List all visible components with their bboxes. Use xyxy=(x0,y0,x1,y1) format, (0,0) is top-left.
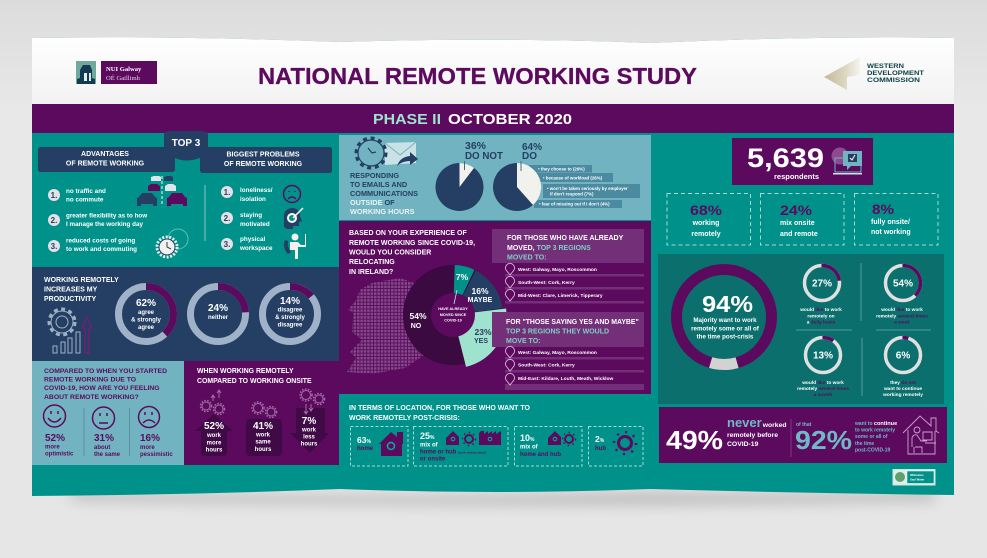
logo: Western Development Commission xyxy=(824,57,924,90)
panel: respondents xyxy=(732,138,873,185)
relocating question xyxy=(349,230,475,276)
box: 2% hub: hub xyxy=(595,446,606,452)
stat box: 24% mix onsite and remote: mix onsite xyxy=(780,220,815,227)
reasons list: • fear of missing out if I don't (4%) xyxy=(539,202,610,206)
stat: 31% about the same: the same xyxy=(94,452,121,458)
stat: 16% more pessimistic: more xyxy=(140,445,155,451)
donut: 14% disagree: 14% xyxy=(280,296,300,307)
stat: 7% work less hours: hours xyxy=(301,442,318,448)
donut: 54% several times a week: remotely several times xyxy=(876,314,928,320)
problems list: loneliness/ xyxy=(240,187,273,194)
advantages list: 1. xyxy=(51,191,57,200)
panel: top 3 advantages and problems xyxy=(32,131,339,267)
donut: 6% do not want to continue: they do not xyxy=(890,380,916,386)
title: NATIONAL REMOTE WORKING STUDY xyxy=(258,63,697,89)
logo: NUI Galway: NUI Galway xyxy=(106,66,142,73)
donut: 94% majority: 94% xyxy=(702,291,753,317)
donut: 13% several times a month: remotely several times xyxy=(797,386,849,392)
responding text: TO EMAILS AND xyxy=(350,180,407,189)
continue text: post-COVID-19 xyxy=(855,448,890,454)
advantages list: 3. xyxy=(51,242,57,251)
panel: hours worked xyxy=(184,361,339,465)
donut: 13% several times a month: would like to work xyxy=(801,380,844,386)
advantages list: no commute xyxy=(66,196,104,204)
responding text: RESPONDING xyxy=(350,171,399,180)
location heading: WORK REMOTELY POST-CRISIS: xyxy=(349,415,460,422)
pie: 64% do: 64% xyxy=(522,141,543,153)
pie: 64% do: DO xyxy=(522,151,537,162)
divider xyxy=(204,185,206,241)
panel: respondents: 5,639 xyxy=(747,143,824,173)
stat box: 8% fully onsite xyxy=(854,194,938,245)
box: 10% mix of home and hub: 10% xyxy=(520,433,535,443)
top 3 heading xyxy=(38,131,332,173)
advantages list: to work and commuting xyxy=(66,246,137,253)
donut: 27% daily: would like to work xyxy=(799,307,842,313)
logo: Western Development Commission: WESTERN xyxy=(867,63,904,70)
stat: 52% work more hours: work xyxy=(206,433,222,439)
relocating question: REMOTE WORKING SINCE COVID-19, xyxy=(349,240,475,247)
never worked text xyxy=(727,415,786,448)
stat box: 68% working remotely: 68% xyxy=(690,202,723,218)
responding text: COMMUNICATIONS xyxy=(350,189,418,198)
donut: 27% daily: remotely on xyxy=(807,314,835,320)
donut chart: relocating: 7% xyxy=(456,272,469,282)
box: 10% mix of home and hub: home and hub xyxy=(520,452,561,458)
donut chart: relocating: 16% xyxy=(471,286,489,296)
header band xyxy=(32,36,954,104)
stat box: 8% fully onsite: 8% xyxy=(872,201,895,217)
donut: 14% disagree: disagree xyxy=(278,308,303,314)
box: 25% mix of home or hub or onsite: mix of xyxy=(420,442,439,448)
pie: 36% do not xyxy=(436,140,503,211)
reasons list: • won't be taken seriously by employer xyxy=(547,186,628,191)
logo: Western Development Commission: DEVELOPMENT xyxy=(867,70,924,77)
productivity heading: WORKING REMOTELY xyxy=(44,277,119,284)
productivity heading: INCREASES MY xyxy=(44,286,98,294)
stat box: 68% working remotely xyxy=(667,194,750,245)
logo: Western Development Commission: COMMISSION xyxy=(867,77,920,84)
icon: clock and gears xyxy=(157,229,188,257)
stat: 41% work same hours xyxy=(246,402,282,456)
box: 63% home: 63% xyxy=(357,435,371,445)
dotted map of Ireland xyxy=(347,278,424,374)
icon: survey on laptop xyxy=(832,148,862,174)
regions already moved: MOVED TO: xyxy=(507,254,547,262)
regions already moved: FOR THOSE WHO HAVE ALREADY xyxy=(507,235,624,242)
problems list xyxy=(221,186,273,252)
panel: location post-crisis xyxy=(349,405,643,466)
productivity heading xyxy=(44,277,119,303)
donut: 62% agree: agree xyxy=(138,310,155,316)
panel: never worked remotely before xyxy=(659,407,947,463)
stat: 52% more optimistic: 52% xyxy=(45,433,65,444)
stat: 7% work less hours: 7% xyxy=(302,416,316,427)
donut: 13% several times a month: a month xyxy=(814,392,832,398)
regions would move to: Mid-East: Kildare, Louth, Meath, Wicklow xyxy=(518,376,614,382)
stat: 52% work more hours xyxy=(195,390,233,456)
panel: productivity xyxy=(32,267,339,361)
stat: 92%: 92% xyxy=(795,425,852,455)
donut: 54% several times a week: a week xyxy=(894,320,910,326)
responding text xyxy=(350,171,418,216)
donut: 14% disagree xyxy=(262,286,318,342)
icon: person at desk xyxy=(284,234,306,259)
advantages list: greater flexibility as to how xyxy=(66,212,147,220)
location heading: IN TERMS OF LOCATION, FOR THOSE WHO WANT TO xyxy=(349,405,531,412)
stat: 31% about the same: 31% xyxy=(94,433,114,444)
regions would move to: FOR "THOSE SAYING YES AND MAYBE" xyxy=(506,319,639,326)
logo: NUI Galway: OÉ Gaillimh xyxy=(106,74,141,82)
box: 63% home: home xyxy=(357,446,374,452)
donut: 94% majority: Majority want to work xyxy=(693,317,757,324)
donut chart: relocating: 23% xyxy=(474,327,492,337)
stat: 7% work less hours: work xyxy=(301,428,317,434)
problems list: 1. xyxy=(224,188,230,197)
hours heading xyxy=(197,368,312,383)
icon: cars xyxy=(137,176,187,206)
reasons list: if don't respond (7%) xyxy=(550,192,594,196)
stat box: 24% mix onsite and remote: and remote xyxy=(780,231,818,238)
stat: 31% about the same: about xyxy=(94,445,110,451)
box: 25% mix of home or hub or onsite: or onsite xyxy=(420,456,446,462)
pie: 36% do not: 36% xyxy=(465,140,487,152)
regions would move to: West: Galway, Mayo, Roscommon xyxy=(518,350,597,356)
box: 25% mix of home or hub or onsite: home or hub (work sharing space) xyxy=(420,450,486,456)
relocating question: BASED ON YOUR EXPERIENCE OF xyxy=(349,230,467,237)
box: 63% home xyxy=(350,426,408,466)
regions would move to: MOVE TO: xyxy=(506,338,540,345)
icon: clock gear and envelope xyxy=(356,138,418,168)
stat: 52% work more hours: hours xyxy=(206,448,223,454)
problems list: staying xyxy=(240,212,262,219)
donut chart: relocating: NO xyxy=(411,323,422,330)
donut: 14% disagree: disagree xyxy=(278,322,303,328)
purple band with phase heading xyxy=(32,104,954,133)
icon: happy face xyxy=(44,405,66,427)
donut: 54% several times a week: would like to work xyxy=(880,307,923,313)
donut: 62% agree xyxy=(118,286,174,342)
stat: 52% more optimistic xyxy=(45,433,74,458)
stat: 52% work more hours: 52% xyxy=(204,421,224,432)
feelings heading xyxy=(44,368,167,401)
box: 25% mix of home or hub or onsite: 25% xyxy=(420,431,435,441)
panel: future remote working preferences xyxy=(658,254,944,404)
brochure page xyxy=(32,36,954,498)
continue text: want to continue xyxy=(854,421,897,427)
page base teal xyxy=(32,36,954,498)
stat: 52% more optimistic: more xyxy=(45,444,60,450)
donut chart: relocating: 54% xyxy=(409,311,427,321)
advantages list: no traffic and xyxy=(66,188,106,195)
box: 2% hub xyxy=(588,426,643,466)
icon: sad face xyxy=(284,186,300,202)
stat: 41% work same hours: same xyxy=(255,440,271,446)
icon: gear and growth bars xyxy=(49,309,92,353)
panel: responding outside working hours xyxy=(339,133,651,221)
problems list: motivated xyxy=(240,221,270,228)
stat: 16% more pessimistic xyxy=(140,433,173,458)
panel: respondents: respondents xyxy=(774,172,819,181)
regions would move to: TOP 3 REGIONS THEY WOULD xyxy=(506,328,609,336)
continue text: some or all of xyxy=(855,434,888,440)
panel: never worked remotely before: of that xyxy=(796,422,812,428)
stat: 52% work more hours: more xyxy=(207,440,222,446)
feelings heading: ABOUT REMOTE WORKING? xyxy=(44,394,139,401)
pie: 36% do not: DO NOT xyxy=(465,151,503,162)
feelings heading: COVID-19, HOW ARE YOU FEELING xyxy=(44,385,160,392)
problems list: 2. xyxy=(224,214,230,223)
stat box: 24% mix onsite and remote xyxy=(760,194,844,245)
relocating question: WOULD YOU CONSIDER xyxy=(349,250,431,256)
relocating question: RELOCATING xyxy=(349,259,395,266)
regions already moved: West: Galway, Mayo, Roscommon xyxy=(518,267,597,273)
productivity heading: PRODUCTIVITY xyxy=(44,296,96,303)
badge: Wicklow xyxy=(893,470,935,485)
stat box: 24% mix onsite and remote: 24% xyxy=(780,202,813,218)
never worked text: COVID-19 xyxy=(727,441,759,448)
donut: 14% disagree: & strongly xyxy=(275,315,305,321)
donut: 94% majority: remotely some or all of xyxy=(691,326,760,332)
stat box: 8% fully onsite: fully onsite/ xyxy=(871,219,910,226)
problems list: isolation xyxy=(240,196,266,203)
advantages list: 2. xyxy=(51,216,57,225)
advantages list: I manage the working day xyxy=(66,221,143,228)
donut: 54% several times a week xyxy=(876,266,928,326)
hours heading: COMPARED TO WORKING ONSITE xyxy=(197,378,312,385)
stat: 7% work less hours: less xyxy=(303,434,315,440)
donut: 6% do not want to continue: 6% xyxy=(896,350,910,362)
stat: 49%: 49% xyxy=(666,425,723,455)
location heading xyxy=(349,405,531,422)
donut: 54% several times a week: 54% xyxy=(893,278,913,290)
donut chart: relocating xyxy=(403,265,503,365)
top 3 heading: TOP 3 xyxy=(172,138,201,149)
top 3 heading: BIGGEST PROBLEMS xyxy=(226,152,300,158)
problems list: workspace xyxy=(239,245,273,252)
donut: 94% majority: the time post-crisis xyxy=(697,334,754,340)
stat: 41% work same hours: hours xyxy=(255,447,272,453)
top 3 heading: OF REMOTE WORKING xyxy=(224,161,303,168)
stat: 7% work less hours xyxy=(290,389,329,453)
reasons list xyxy=(529,165,640,208)
donut: 6% do not want to continue: working remotely xyxy=(882,392,923,398)
icon: sad face xyxy=(138,406,160,428)
reasons list: • they choose to (26%) xyxy=(538,166,585,172)
advantages list: reduced costs of going xyxy=(66,238,135,244)
box: 10% mix of home and hub xyxy=(514,426,582,466)
purple band with phase heading: OCTOBER 2020 xyxy=(448,111,572,128)
stat: 41% work same hours: 41% xyxy=(253,421,273,432)
stat: 41% work same hours: work xyxy=(255,432,271,438)
box: 25% mix of home or hub or onsite xyxy=(414,426,508,466)
responding text: OUTSIDE OF xyxy=(350,198,395,207)
donut: 13% several times a month xyxy=(797,338,849,398)
feelings heading: REMOTE WORKING DUE TO xyxy=(44,376,136,384)
donut chart: relocating: MAYBE xyxy=(468,297,493,304)
responding text: WORKING HOURS xyxy=(350,207,415,216)
donut: 24% neither: 24% xyxy=(208,303,228,314)
stat: 16% more pessimistic: pessimistic xyxy=(140,452,173,458)
regions would move to xyxy=(492,312,644,390)
donut: 62% agree: agree xyxy=(138,325,155,331)
regions would move to: South-West: Cork, Kerry xyxy=(518,362,575,368)
box: 10% mix of home and hub: mix of xyxy=(520,444,539,450)
continue text: to work remotely xyxy=(855,428,895,434)
icon: person working at home xyxy=(903,416,939,454)
donut: 62% agree: 62% xyxy=(136,298,156,309)
donut chart: relocating: YES xyxy=(474,338,488,345)
reasons list: • because of workload (26%) xyxy=(543,176,603,180)
donut: 62% agree: & strongly xyxy=(131,318,161,324)
donut: 24% neither xyxy=(190,286,246,342)
stat box: 68% working remotely: remotely xyxy=(691,231,721,238)
feelings heading: COMPARED TO WHEN YOU STARTED xyxy=(44,368,167,375)
box: 2% hub: 2% xyxy=(595,434,605,444)
relocating question: IN IRELAND? xyxy=(349,269,393,276)
donut chart: relocating: MOVED SINCE xyxy=(440,313,467,317)
top 3 heading: ADVANTAGES xyxy=(81,151,129,158)
donut: 6% do not want to continue xyxy=(882,338,923,398)
regions already moved: South-West: Cork, Kerry xyxy=(518,280,575,286)
donut: 24% neither: neither xyxy=(208,315,229,321)
logo: NUI Galway xyxy=(76,61,157,84)
advantages list xyxy=(48,188,147,253)
continue text: the time xyxy=(855,441,874,447)
hours heading: WHEN WORKING REMOTELY xyxy=(197,368,294,375)
icon: target head xyxy=(284,208,303,229)
page shadow xyxy=(70,492,935,504)
never worked text: neverworked xyxy=(727,415,786,430)
stat box: 68% working remotely: working xyxy=(692,220,719,227)
regions already moved xyxy=(492,229,644,304)
problems list: 3. xyxy=(224,240,230,249)
stat: 52% more optimistic: optimistic xyxy=(45,452,74,458)
phase heading: PHASE II xyxy=(373,111,441,128)
badge: Wicklow: Saol Water xyxy=(910,478,925,482)
panel: feelings about remote working xyxy=(32,361,184,465)
badge: Wicklow: Whitsdare xyxy=(910,473,924,477)
stat: 31% about the same xyxy=(94,434,120,456)
top 3 heading: OF REMOTE WORKING xyxy=(66,160,145,168)
regions already moved: MOVED, TOP 3 REGIONS xyxy=(507,245,591,252)
donut: 6% do not want to continue: want to continue xyxy=(883,386,922,392)
regions already moved: Mid-West: Clare, Limerick, Tipperary xyxy=(518,293,603,299)
donut: 13% several times a month: 13% xyxy=(813,350,833,362)
panel: relocating xyxy=(339,221,651,394)
donut chart: relocating: COVID-19 xyxy=(444,318,462,322)
donut: 94% majority xyxy=(665,258,783,376)
stat: 16% more pessimistic: 16% xyxy=(140,433,160,444)
continue text xyxy=(854,421,897,454)
donut: 27% daily: a daily basis xyxy=(807,320,836,326)
never worked text: remotely before xyxy=(727,432,778,439)
donut chart: relocating: HAVE ALREADY xyxy=(438,307,468,311)
donut: 27% daily: 27% xyxy=(812,278,832,290)
pie: 64% do xyxy=(493,141,543,211)
icon: neutral face xyxy=(92,407,114,429)
donut: 27% daily xyxy=(799,266,842,326)
problems list: physical xyxy=(240,236,265,243)
stat box: 8% fully onsite: not working xyxy=(871,229,911,236)
